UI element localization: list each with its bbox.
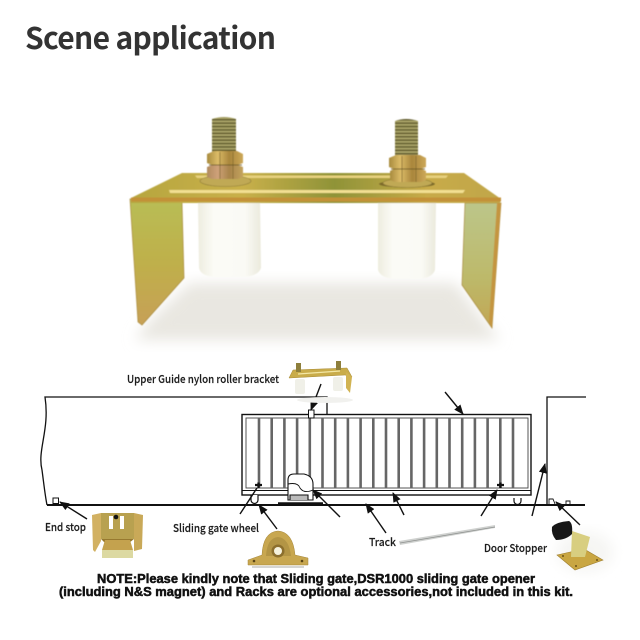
icon: sliding gate wheel [248, 531, 308, 567]
gate installation diagram [41, 384, 586, 533]
left bolt and nuts [200, 117, 251, 186]
label: upper guide: Upper Guide nylon roller bracket [127, 371, 280, 387]
arrows [60, 384, 580, 533]
left gate wheel [251, 495, 258, 504]
right wall outline [547, 397, 586, 505]
right white nylon roller [378, 202, 436, 279]
end stop marker [53, 498, 58, 504]
label: end stop: End stop [45, 519, 86, 535]
label: track: Track [369, 534, 397, 550]
sliding gate opener motor [278, 474, 323, 504]
product photo: guide roller bracket [130, 117, 501, 340]
sliding gate [242, 410, 531, 495]
left wall outline [41, 397, 327, 505]
note text [59, 572, 573, 599]
icon: track rail [399, 525, 495, 545]
top plate [131, 173, 501, 203]
left guide clamp [255, 482, 262, 488]
right guide clamp [497, 482, 504, 488]
gate bars [259, 418, 513, 488]
right bracket leg [462, 203, 501, 328]
left white nylon roller [198, 202, 261, 277]
label: sliding gate wheel: Sliding gate wheel [173, 520, 259, 536]
icon: upper guide bracket [289, 361, 353, 403]
door stopper marker [549, 499, 570, 504]
label: door stopper: Door Stopper [484, 540, 547, 556]
note text: (including N&S magnet) and Racks are optional accessories,not included in this kit. [59, 585, 573, 599]
right bolt and nuts [383, 119, 432, 188]
note text: NOTE:Please kindly note that Sliding gate,DSR1000 sliding gate opener [97, 572, 535, 586]
icon: door stopper [552, 521, 613, 572]
surface shadow [135, 283, 500, 340]
right gate wheel [514, 498, 521, 505]
title: Scene application [25, 14, 276, 58]
ground line [47, 504, 585, 506]
icon: end stop bracket [92, 513, 143, 558]
left bracket leg [130, 199, 184, 325]
